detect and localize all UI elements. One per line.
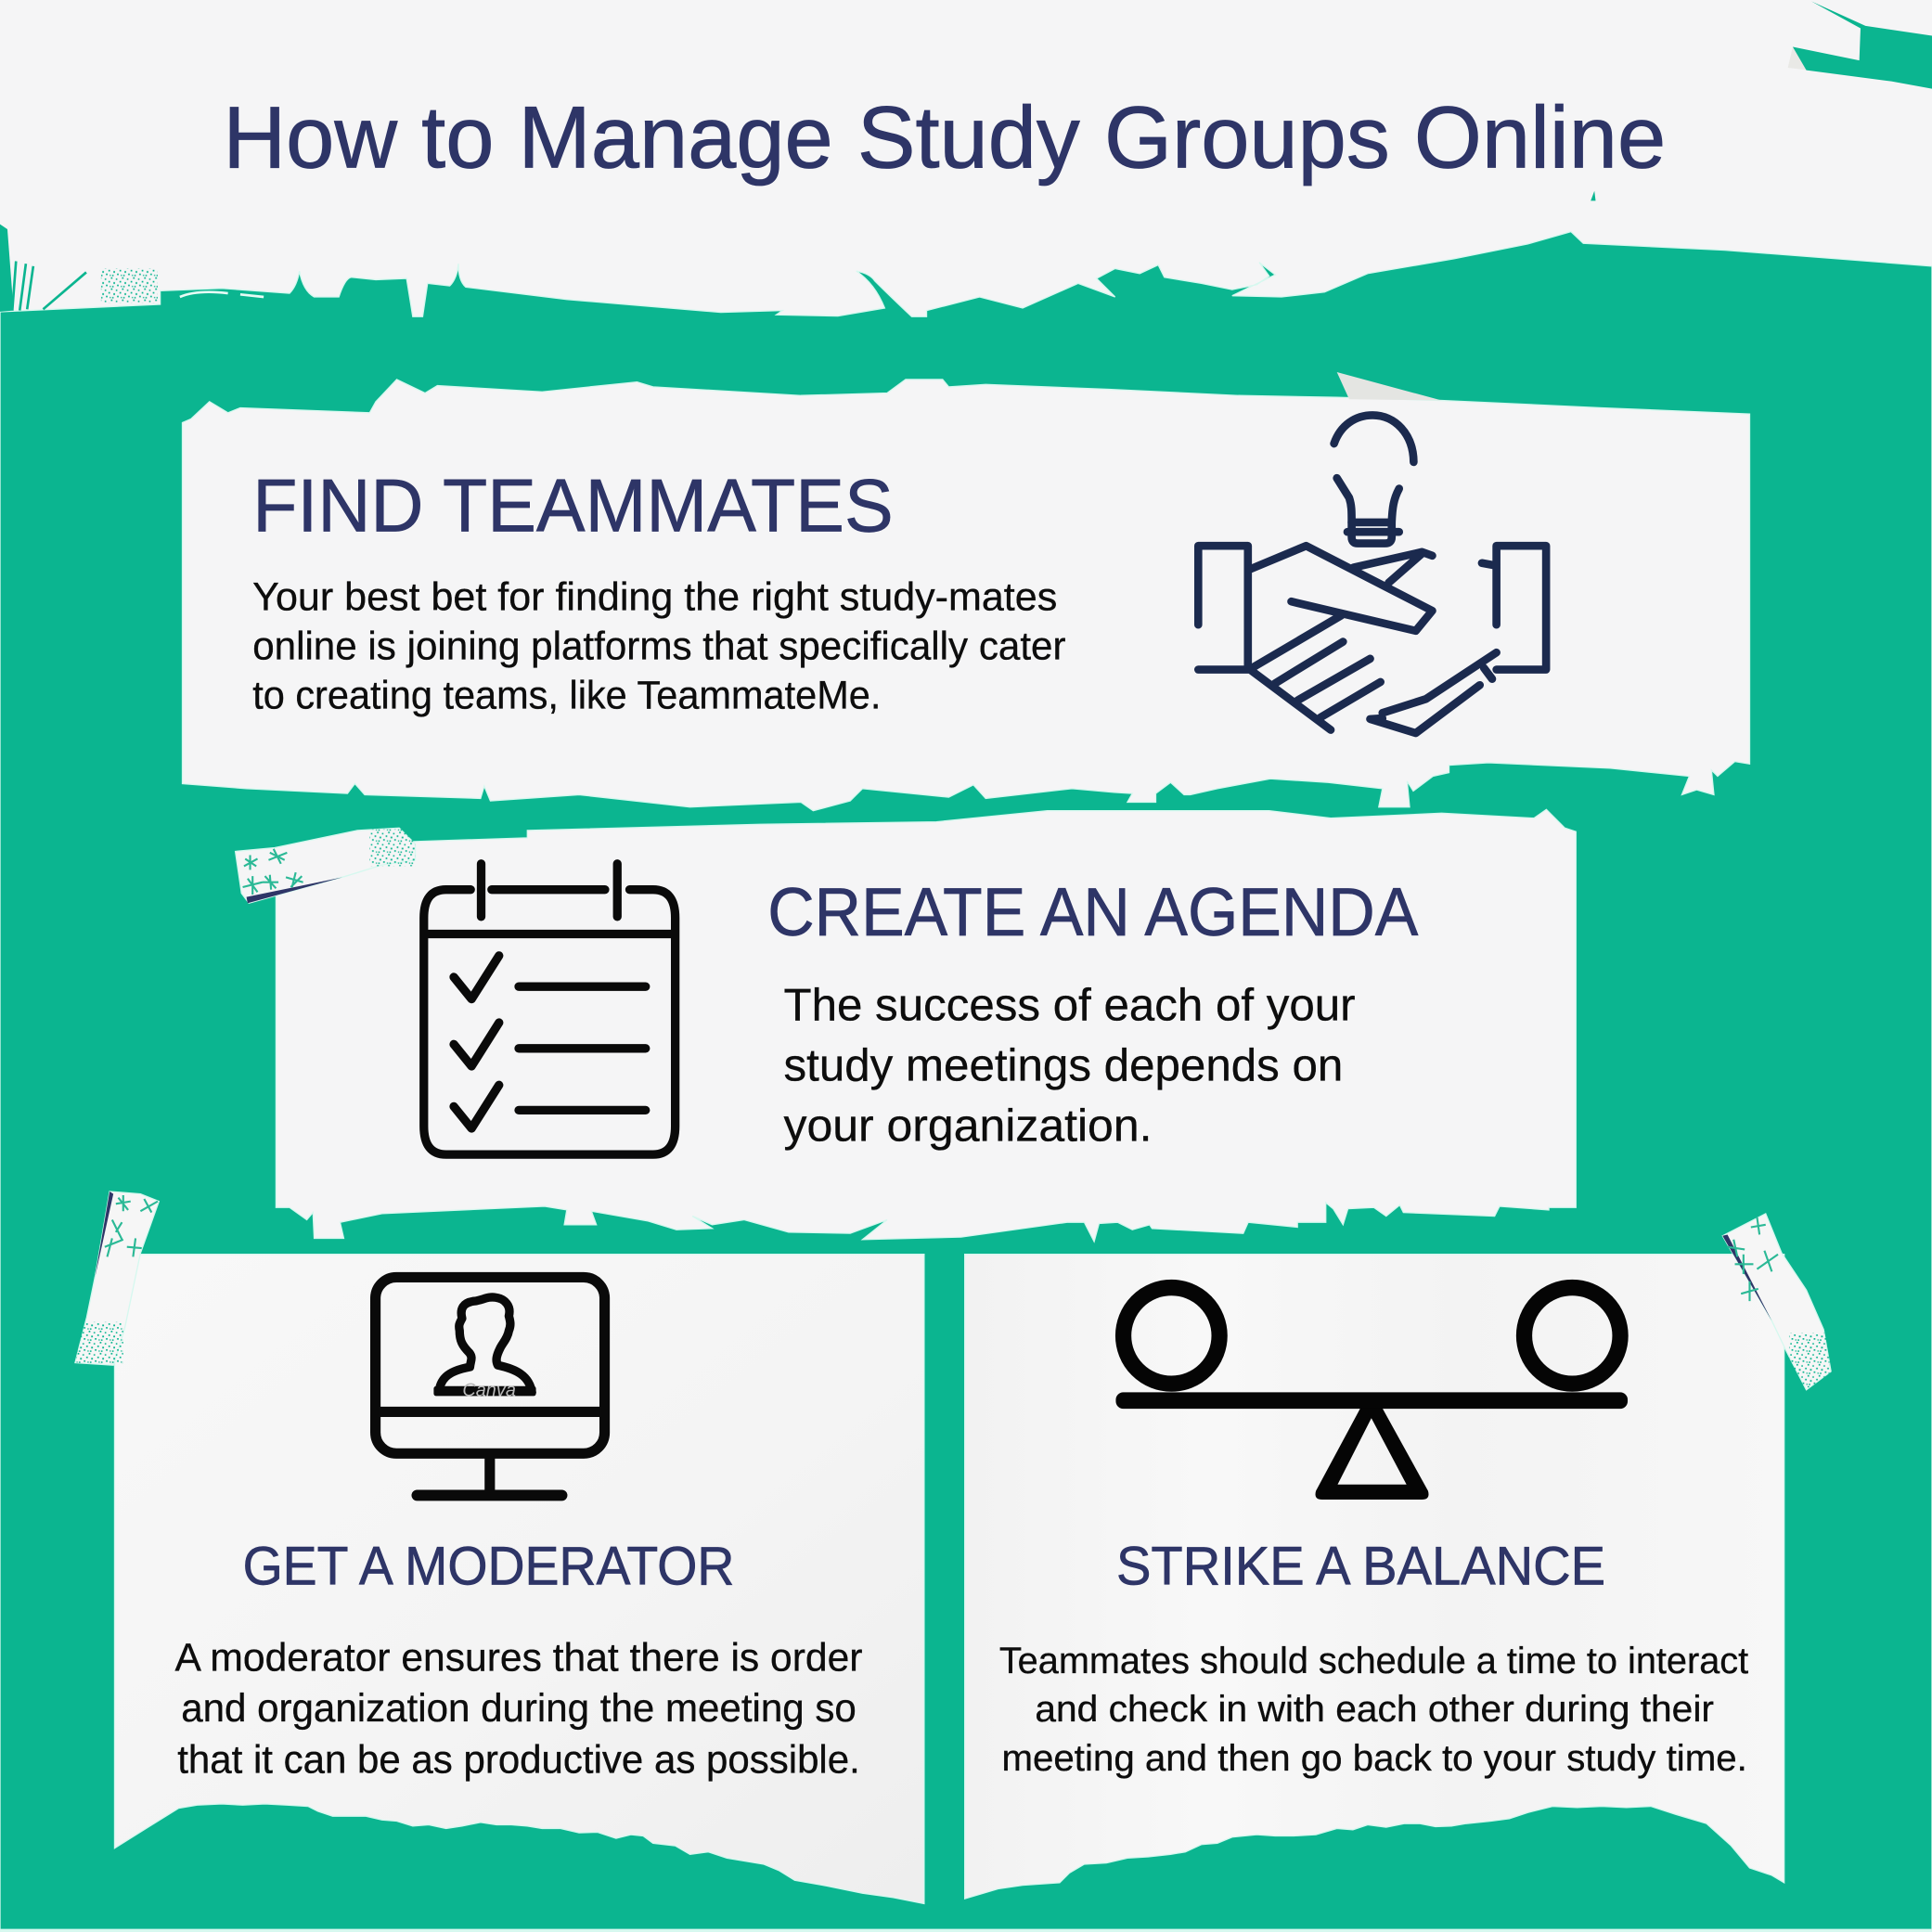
text block: strike a balance: meeting and then go back to your study time. (1002, 1738, 1747, 1779)
text block: strike a balance: and check in with each other during their (1035, 1689, 1714, 1730)
text block: strike a balance: Teammates should schedule a time to interact (999, 1641, 1748, 1681)
text block: get a moderator: that it can be as productive as possible. (177, 1739, 860, 1783)
tape: panel 3 corner (75, 1191, 159, 1365)
heading: create an agenda: CREATE AN AGENDA (767, 875, 1419, 950)
text block: create an agenda: study meetings depends on (783, 1040, 1343, 1090)
heading: get a moderator: GET A MODERATOR (243, 1537, 734, 1597)
icon: balance seesaw (1115, 1288, 1628, 1500)
watermark in monitor icon: Canva (462, 1380, 516, 1400)
text block: find teammates: online is joining platforms that specifically cater (252, 625, 1066, 668)
panel: find teammates (183, 372, 1749, 811)
decoration: top-right green tape (1591, 1, 1932, 200)
panel: strike a balance (965, 1255, 1784, 1899)
text block: find teammates: to creating teams, like TeammateMe. (252, 674, 881, 717)
panel: create an agenda (276, 809, 1576, 1242)
paper fold corner (1337, 372, 1442, 401)
heading: strike a balance: STRIKE A BALANCE (1116, 1537, 1605, 1597)
icon: handshake with light bulb (1198, 415, 1546, 733)
text block: create an agenda: your organization. (783, 1101, 1152, 1152)
text block: get a moderator (175, 1637, 862, 1783)
panel 2 torn paper (276, 809, 1576, 1242)
text block: strike a balance (999, 1641, 1748, 1779)
text block: create an agenda: The success of each of your (783, 980, 1356, 1030)
tape: panel 4 corner (1722, 1214, 1831, 1390)
heading: find teammates: FIND TEAMMATES (252, 464, 894, 547)
title: How to Manage Study Groups Online (223, 89, 1666, 187)
text block: find teammates (252, 575, 1066, 717)
icon: monitor with user (376, 1277, 605, 1495)
tape: panel 2 corner (236, 828, 415, 903)
text block: create an agenda (783, 980, 1356, 1152)
panel 1 torn paper (183, 380, 1749, 811)
icon: calendar checklist (424, 864, 676, 1154)
panel 3 paper (114, 1255, 924, 1903)
text block: get a moderator: A moderator ensures that there is order (175, 1637, 862, 1681)
text block: get a moderator: and organization during the meeting so (181, 1687, 857, 1731)
panel: get a moderator (114, 1255, 924, 1903)
decoration: top-left grass streaks and speckled tape (0, 225, 264, 312)
panel 4 paper (965, 1255, 1784, 1899)
text block: find teammates: Your best bet for finding the right study-mates (252, 575, 1057, 619)
bottom edge strip (0, 1929, 1932, 1932)
